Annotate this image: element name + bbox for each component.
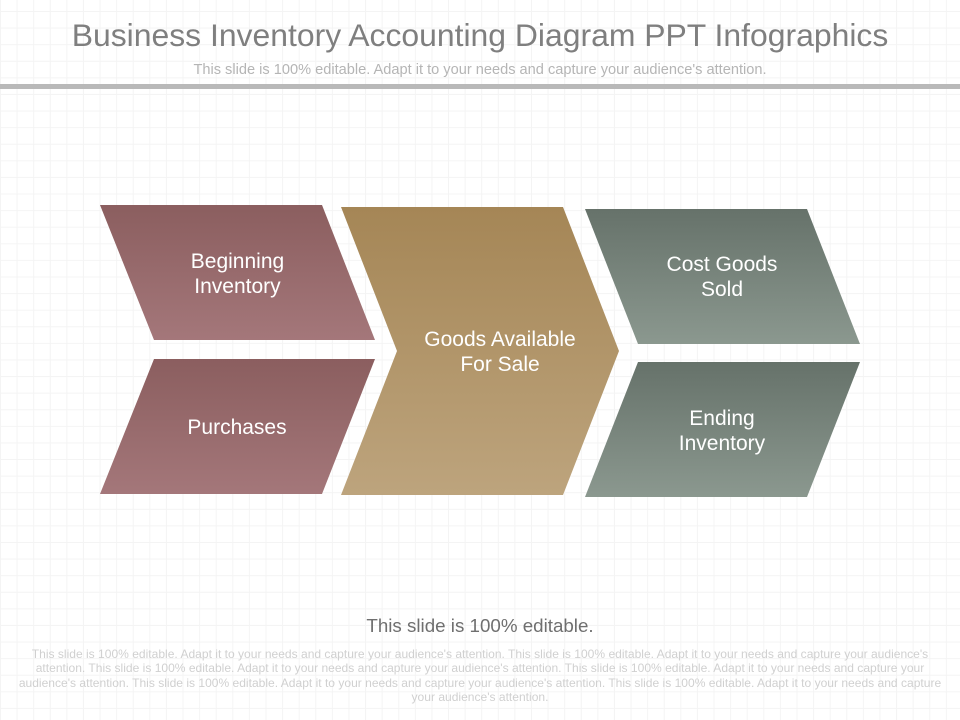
panel: goods available for sale: Goods Available — [424, 328, 576, 351]
footer body text: audience's attention. This slide is 100% editable. Adapt it to your needs and capture your audience's attention. This slide is 100% editable. Adapt it to your needs and capture — [19, 676, 941, 690]
footer body text: attention. This slide is 100% editable. Adapt it to your needs and capture your audience's attention. This slide is 100% editable. Adapt it to your needs and capture your — [36, 661, 924, 675]
footer body text: This slide is 100% editable. Adapt it to your needs and capture your audience's attention. This slide is 100% editable. Adapt it to your needs and capture your audience's — [32, 647, 928, 661]
panel: cost goods sold — [585, 209, 860, 344]
title: Business Inventory Accounting Diagram PPT Infographics — [72, 17, 888, 53]
panel: ending inventory: Inventory — [679, 432, 766, 455]
panel: beginning inventory: Beginning — [191, 250, 284, 273]
panel: purchases: Purchases — [187, 416, 287, 439]
panel: goods available for sale: For Sale — [460, 353, 540, 376]
panel: cost goods sold: Cost Goods — [667, 253, 777, 276]
footer body text — [19, 647, 941, 704]
panel: beginning inventory: Inventory — [194, 275, 281, 298]
header rule — [0, 84, 960, 89]
panel: cost goods sold: Sold — [701, 278, 743, 301]
footer body text: your audience's attention. — [412, 690, 548, 704]
subtitle: This slide is 100% editable. Adapt it to your needs and capture your audience's attention. — [193, 62, 767, 78]
panel: beginning inventory — [100, 205, 375, 340]
panel: purchases — [100, 359, 375, 494]
footer heading: This slide is 100% editable. — [366, 615, 594, 636]
panel: goods available for sale — [341, 207, 619, 495]
panel: ending inventory: Ending — [689, 407, 755, 430]
panel: ending inventory — [585, 362, 860, 497]
